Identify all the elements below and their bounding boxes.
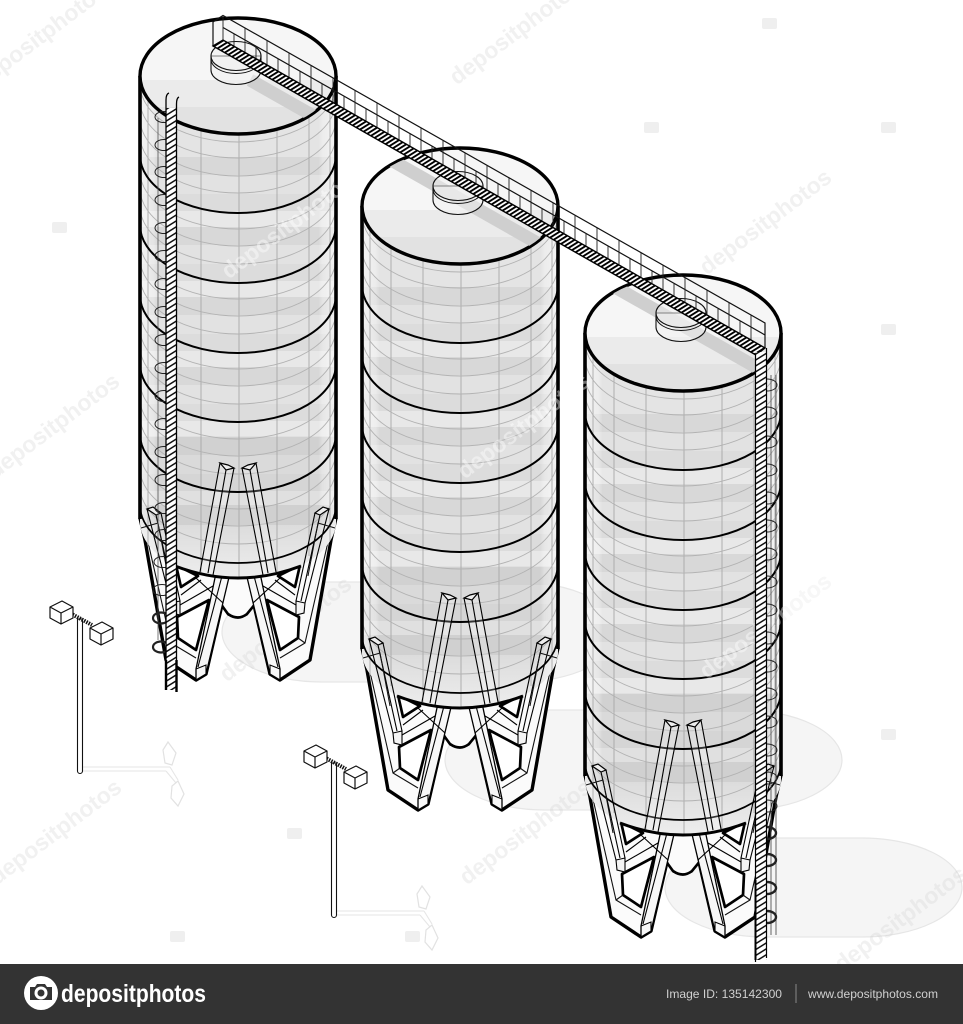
silo 3 ladder — [756, 352, 766, 960]
lamp post 2 — [304, 745, 367, 918]
silo 1 cage loops — [153, 112, 173, 652]
background watermark: depositphotos — [454, 774, 596, 890]
silo 3 right struts — [687, 720, 780, 872]
footer bar — [0, 964, 963, 1024]
background watermark: depositphotos — [694, 568, 836, 684]
silo 2 roof — [362, 148, 558, 267]
silo 1 — [140, 18, 336, 680]
silo 1 left struts — [141, 463, 234, 615]
silo 1 roof — [140, 18, 336, 137]
silo 1 access ladder — [153, 93, 179, 692]
silo 1 ladder — [166, 108, 176, 690]
footer website: www.depositphotos.com — [807, 987, 938, 1001]
silo 3 ladder cage lines — [771, 375, 776, 935]
silo 1 left leg — [140, 518, 230, 680]
silo 3 right leg — [691, 775, 781, 937]
background watermark: depositphotos — [694, 164, 836, 280]
silo 2 tank — [362, 206, 558, 716]
silo 3 left leg — [585, 775, 675, 937]
walkway railing — [213, 16, 765, 348]
roof vent silo 2 — [433, 172, 483, 214]
silo 1 hopper — [205, 573, 271, 618]
roof vent silo 1 — [211, 42, 261, 84]
silo 2 — [362, 148, 558, 810]
footer brand name: depositphotos — [61, 980, 206, 1008]
ground shadows — [222, 582, 962, 937]
watermark camera marks — [52, 18, 896, 942]
background watermark: depositphotos — [214, 571, 356, 687]
image id: Image ID: 135142300 — [666, 987, 782, 1001]
silo 2 hopper — [427, 703, 493, 748]
silo 2 left leg — [362, 648, 452, 810]
silo 1 right leg — [246, 518, 336, 680]
watermark over silos: depositphotos — [694, 568, 836, 684]
walkway bridge — [213, 16, 765, 355]
silo 3 left struts — [586, 720, 679, 872]
silo 1 tank — [140, 76, 336, 586]
silo 2 right leg — [468, 648, 558, 810]
silo 1 right struts — [242, 463, 335, 615]
railing posts — [223, 16, 751, 340]
silo 3 — [585, 275, 781, 937]
watermark over silos — [216, 168, 836, 684]
silo 3 tank — [585, 333, 781, 843]
silo 2 left struts — [363, 593, 456, 745]
watermark over silos: depositphotos — [216, 168, 358, 284]
walkway shadow on roofs — [250, 80, 770, 375]
footer logo icon — [24, 976, 58, 1010]
roof vent silo 3 — [656, 298, 706, 341]
silo 3 hopper — [650, 830, 716, 875]
lamp post 1 — [50, 601, 113, 774]
lamp post shadow 1 — [83, 742, 184, 806]
footer divider — [796, 984, 797, 1003]
silo 3 roof — [585, 275, 781, 394]
silo 3 cage loops — [757, 379, 777, 923]
watermark over silos: depositphotos — [452, 368, 594, 484]
lamp post shadow 2 — [337, 886, 438, 950]
silo 2 right struts — [464, 593, 557, 745]
silo 1 ladder cage lines — [157, 118, 159, 640]
silo 3 access ladder — [756, 348, 777, 962]
walkway deck — [213, 40, 765, 355]
